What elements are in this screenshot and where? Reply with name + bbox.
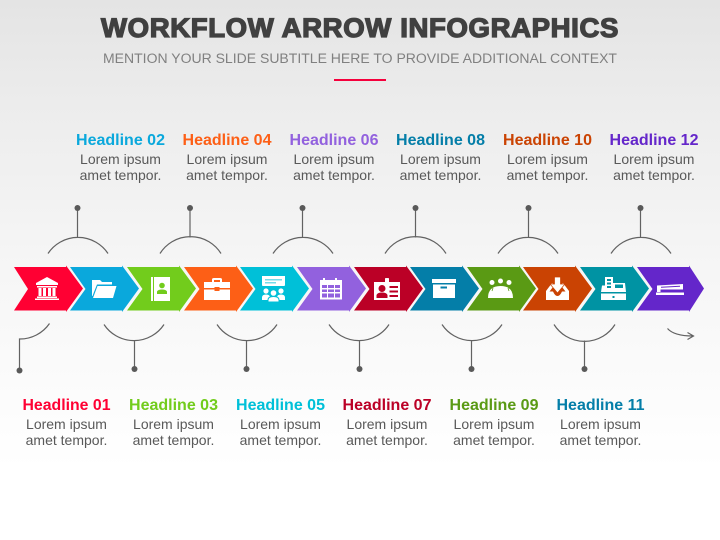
text block 05: Lorem ipsum xyxy=(240,416,321,432)
connector 08 xyxy=(385,205,446,254)
connector 07 xyxy=(329,324,389,372)
text block 03: Headline 03 xyxy=(129,397,218,414)
text block 08: Lorem ipsum xyxy=(400,151,481,167)
text block 02: Headline 02 xyxy=(76,132,165,149)
text block 02 xyxy=(76,132,165,183)
text block 10: amet tempor. xyxy=(507,167,588,183)
text block 07 xyxy=(342,397,432,448)
text block 06 xyxy=(290,132,379,183)
arrow 09 with team icon xyxy=(467,266,536,312)
text block 11: Headline 11 xyxy=(556,397,645,414)
text block 01: Lorem ipsum xyxy=(26,416,107,432)
connector 09 xyxy=(442,324,502,372)
text block 07: Headline 07 xyxy=(342,397,432,414)
text block 01 xyxy=(22,397,111,448)
title: WORKFLOW ARROW INFOGRAPHICS xyxy=(101,13,619,43)
connector 03 xyxy=(104,324,164,372)
arrow 07 with ID badge icon xyxy=(354,266,423,312)
connector 11 xyxy=(554,324,615,372)
end arrow xyxy=(668,328,694,340)
text block 03: Lorem ipsum xyxy=(133,416,214,432)
text block 11: amet tempor. xyxy=(560,432,641,448)
arrow 12 with stapler icon xyxy=(637,266,704,312)
arrow 01 with bank icon xyxy=(14,266,83,312)
text block 08 xyxy=(396,132,485,183)
connector 01 xyxy=(16,324,50,374)
text block 09: Lorem ipsum xyxy=(454,416,534,432)
connector 02 xyxy=(48,205,108,254)
bottom connectors xyxy=(16,324,694,374)
text block 01: Headline 01 xyxy=(22,397,111,414)
text block 12: Lorem ipsum xyxy=(614,151,694,167)
arrow chain xyxy=(14,266,704,312)
text block 05: Headline 05 xyxy=(236,397,325,414)
text block 03: amet tempor. xyxy=(133,432,214,448)
text block 07: amet tempor. xyxy=(346,432,428,448)
text block 04: Headline 04 xyxy=(182,132,272,149)
text block 09 xyxy=(450,397,539,448)
text block 09: amet tempor. xyxy=(453,432,535,448)
text block 03 xyxy=(129,397,218,448)
text block 10: Lorem ipsum xyxy=(507,151,588,167)
connector 06 xyxy=(273,205,333,254)
text block 09: Headline 09 xyxy=(450,397,539,414)
text block 02: Lorem ipsum xyxy=(80,151,161,167)
text block 01: amet tempor. xyxy=(26,432,107,448)
arrow 02 with folder icon xyxy=(70,266,139,312)
text block 07: Lorem ipsum xyxy=(347,416,427,432)
text block 06: Lorem ipsum xyxy=(294,151,374,167)
text block 11: Lorem ipsum xyxy=(560,416,641,432)
text block 02: amet tempor. xyxy=(80,167,161,183)
text block 06: Headline 06 xyxy=(290,132,379,149)
connector 12 xyxy=(611,205,671,254)
text block 04 xyxy=(182,132,272,183)
arrow 06 with calendar icon xyxy=(297,266,366,312)
text block 11 xyxy=(556,397,645,448)
arrow 08 with archive box icon xyxy=(410,266,479,312)
arrow 10 with inbox download icon xyxy=(523,266,592,312)
text block 12: amet tempor. xyxy=(613,167,695,183)
text block 08: amet tempor. xyxy=(400,167,481,183)
connector 10 xyxy=(498,205,558,254)
text block 08: Headline 08 xyxy=(396,132,485,149)
text block 04: amet tempor. xyxy=(186,167,268,183)
arrow 03 with contact book icon xyxy=(127,266,196,312)
text block 10 xyxy=(503,132,592,183)
arrow 11 with cash register icon xyxy=(580,266,649,312)
text block 05: amet tempor. xyxy=(240,432,321,448)
title accent line xyxy=(334,79,386,81)
arrow 04 with briefcase icon xyxy=(184,266,253,312)
text block 06: amet tempor. xyxy=(293,167,375,183)
subtitle: MENTION YOUR SLIDE SUBTITLE HERE TO PROVIDE ADDITIONAL CONTEXT xyxy=(103,51,617,67)
text block 04: Lorem ipsum xyxy=(187,151,267,167)
connector 05 xyxy=(217,324,277,372)
text block 05 xyxy=(236,397,325,448)
top connectors xyxy=(48,205,671,254)
arrow 05 with meeting icon xyxy=(240,266,309,312)
connector 04 xyxy=(160,205,221,254)
text block 12 xyxy=(610,132,699,183)
text block 12: Headline 12 xyxy=(610,132,699,149)
text block 10: Headline 10 xyxy=(503,132,592,149)
